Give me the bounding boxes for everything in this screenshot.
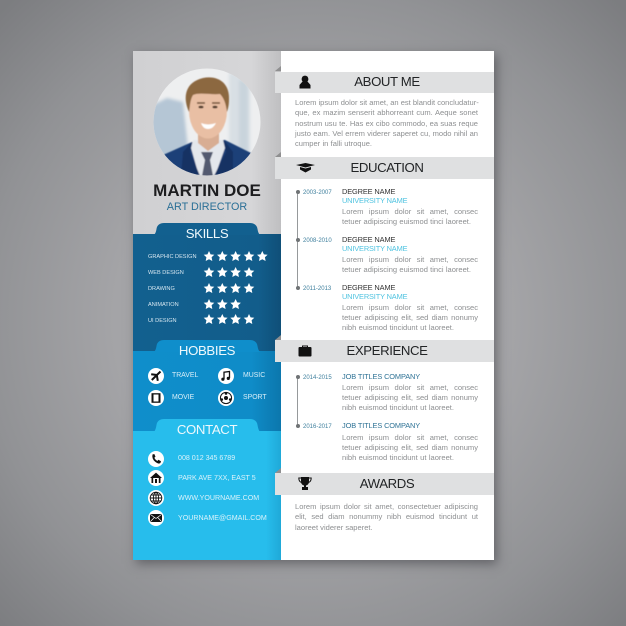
awards text: laoreet viderer saperet. bbox=[295, 522, 373, 532]
skills tab bbox=[154, 223, 260, 234]
resume sheet bbox=[133, 51, 494, 560]
heading: hobbies: HOBBIES bbox=[179, 343, 235, 358]
experience entry 2: tetuer adipiscing elit, sed diam nonumy bbox=[342, 443, 478, 452]
panel: white main column bbox=[281, 51, 494, 560]
section header: about me bbox=[275, 66, 494, 93]
icon: travel bbox=[148, 368, 164, 384]
about heading: ABOUT ME bbox=[354, 74, 420, 89]
section header: awards bbox=[275, 468, 494, 495]
header bar bbox=[275, 473, 494, 495]
panel: sidebar header bbox=[133, 51, 281, 234]
education entry 2: DEGREE NAME bbox=[342, 235, 395, 244]
education entry 3 bbox=[303, 283, 478, 332]
education entry 2 bbox=[303, 235, 478, 274]
header bar bbox=[275, 157, 494, 179]
education entry 2: Lorem ipsum dolor sit amet, consec bbox=[342, 254, 478, 264]
panel: skills background bbox=[133, 234, 281, 351]
experience heading: EXPERIENCE bbox=[346, 343, 428, 358]
portrait photo bbox=[154, 68, 260, 176]
icon: music bbox=[218, 368, 234, 384]
icon: mail bbox=[148, 510, 164, 526]
text: phone: 008 012 345 6789 bbox=[178, 454, 235, 462]
experience entry 1: tetuer adipiscing elit, sed diam nonumy bbox=[342, 393, 478, 402]
hobbies tab bbox=[154, 340, 260, 352]
icon: phone bbox=[148, 451, 164, 467]
experience entry 1: 2014-2015 bbox=[303, 375, 332, 381]
education entry 1: tetuer adipiscing euismod tinci laoreet. bbox=[342, 217, 471, 226]
icon: person bbox=[300, 76, 310, 88]
rating: drawing bbox=[204, 283, 254, 293]
icon: movie bbox=[148, 390, 164, 406]
icon: trophy bbox=[298, 477, 312, 490]
icon: home bbox=[148, 470, 164, 486]
icon: graduation cap bbox=[296, 163, 315, 172]
awards text: elit, sed diam nonummy nibh euismod tincidunt ut bbox=[295, 512, 478, 521]
education entry 3: Lorem ipsum dolor sit amet, consec bbox=[342, 302, 478, 312]
experience timeline line bbox=[297, 377, 298, 426]
label: travel: TRAVEL bbox=[172, 372, 198, 379]
skill label: ui design: UI DESIGN bbox=[148, 318, 177, 324]
header fold bbox=[275, 66, 281, 71]
awards text: Lorem ipsum dolor sit amet, consectetuer adipiscing bbox=[295, 502, 478, 511]
experience entry 2: 2016-2017 bbox=[303, 424, 332, 430]
experience entry 1: JOB TITLES COMPANY bbox=[342, 372, 420, 381]
rating: web design bbox=[204, 267, 254, 277]
label: sport: SPORT bbox=[243, 394, 267, 401]
experience entry 2 bbox=[303, 421, 478, 462]
education entry 2: tetuer adipiscing euismod tinci laoreet. bbox=[342, 265, 471, 274]
header bar bbox=[275, 340, 494, 362]
skill label: drawing: DRAWING bbox=[148, 286, 175, 292]
experience entry 1: nibh euismod tincidunt ut laoreet. bbox=[342, 403, 454, 412]
skill label: animation: ANIMATION bbox=[148, 302, 179, 308]
panel: contact background bbox=[133, 431, 281, 560]
experience entry 2: JOB TITLES COMPANY bbox=[342, 421, 420, 430]
section header: experience bbox=[275, 335, 494, 362]
education entry 2: UNIVERSITY NAME bbox=[342, 244, 407, 253]
section header: education bbox=[275, 152, 494, 179]
about me text: que, ex mazim senserit abhorreant cum. Aeque sonet bbox=[295, 108, 478, 117]
timeline dots: education bbox=[296, 190, 300, 290]
label: music: MUSIC bbox=[243, 372, 265, 379]
job title: ART DIRECTOR bbox=[167, 200, 247, 212]
header bar bbox=[275, 72, 494, 93]
experience entry 2: Lorem ipsum dolor sit amet, consec bbox=[342, 432, 478, 442]
icon: sport bbox=[218, 390, 234, 406]
name: MARTIN DOE bbox=[153, 180, 261, 200]
education heading: EDUCATION bbox=[350, 160, 424, 175]
about me text: Lorem ipsum dolor sit amet, an est blandit concludatur- bbox=[295, 98, 479, 107]
education entry 3: tetuer adipiscing elit, sed diam nonumy bbox=[342, 313, 478, 322]
contact tab bbox=[154, 419, 260, 431]
education entry 3: DEGREE NAME bbox=[342, 283, 395, 292]
education entry 3: nibh euismod tincidunt ut laoreet. bbox=[342, 323, 454, 332]
education timeline line bbox=[297, 192, 298, 289]
experience entry 1 bbox=[303, 372, 478, 412]
experience entry 1: Lorem ipsum dolor sit amet, consec bbox=[342, 382, 478, 392]
timeline dots: experience bbox=[296, 375, 300, 428]
education entry 1: UNIVERSITY NAME bbox=[342, 196, 407, 205]
about me text: justo eam. Vel errem viderer saperet cu, modo nihil an bbox=[295, 129, 478, 138]
education entry 1: 2003-2007 bbox=[303, 190, 332, 196]
rating: ui design bbox=[204, 314, 254, 324]
experience entry 2: nibh euismod tincidunt ut laoreet. bbox=[342, 453, 454, 462]
education entry 3: UNIVERSITY NAME bbox=[342, 292, 407, 301]
heading: contact: CONTACT bbox=[177, 422, 237, 437]
about me text bbox=[294, 98, 479, 148]
education entry 2: 2008-2010 bbox=[303, 238, 332, 244]
rating: graphic design bbox=[204, 251, 268, 261]
heading: skills: SKILLS bbox=[186, 226, 228, 241]
education entry 1: DEGREE NAME bbox=[342, 187, 395, 196]
awards text bbox=[295, 502, 478, 532]
text: email: YOURNAME@GMAIL.COM bbox=[178, 514, 267, 522]
text: address: PARK AVE 7XX, EAST 5 bbox=[178, 474, 256, 482]
rating: animation bbox=[204, 299, 241, 309]
header fold bbox=[275, 468, 281, 473]
about me text: cumper in falli utroque. bbox=[295, 139, 372, 148]
education entry 3: 2011-2013 bbox=[303, 286, 331, 292]
header fold bbox=[275, 152, 281, 157]
label: movie: MOVIE bbox=[172, 394, 194, 401]
skill label: web design: WEB DESIGN bbox=[148, 270, 184, 276]
skill label: graphic design: GRAPHIC DESIGN bbox=[148, 254, 196, 260]
icon: briefcase bbox=[298, 346, 312, 356]
text: website: WWW.YOURNAME.COM bbox=[178, 494, 259, 502]
about me text: nostrum usu te. Has ex cibo commodo, ea suas reque bbox=[295, 119, 478, 128]
awards heading: AWARDS bbox=[360, 476, 414, 491]
icon: globe bbox=[148, 490, 164, 506]
education entry 1: Lorem ipsum dolor sit amet, consec bbox=[342, 206, 478, 216]
header fold bbox=[275, 335, 281, 340]
education entry 1 bbox=[303, 187, 478, 226]
panel: hobbies background bbox=[133, 351, 281, 431]
